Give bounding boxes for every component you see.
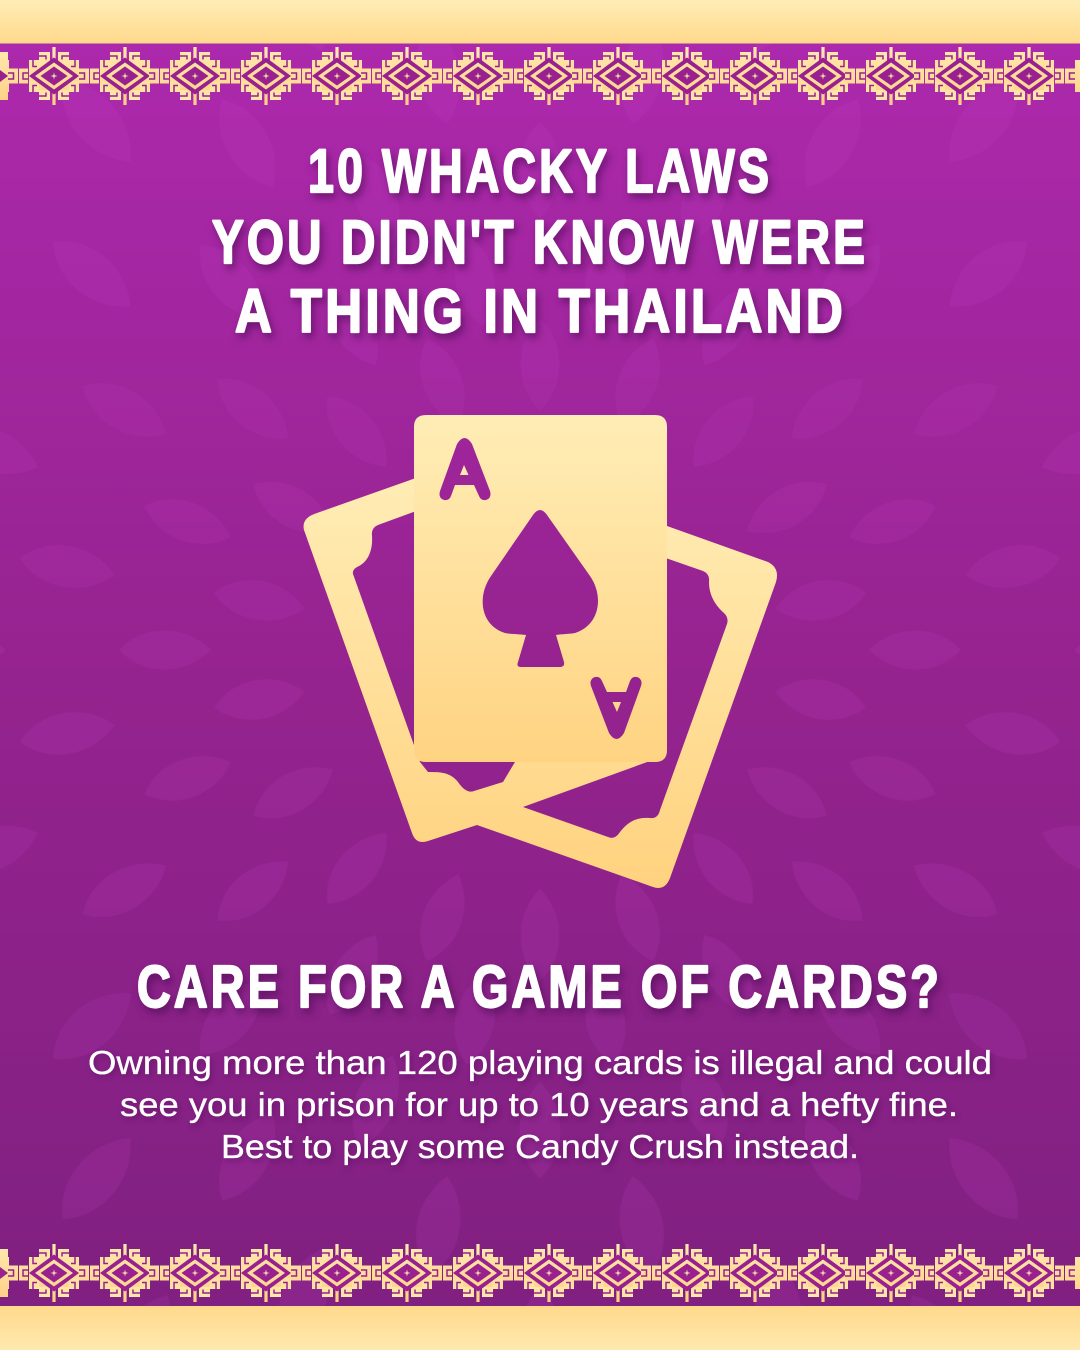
body text: see you in prison for up to 10 years and a hefty fine. [120, 1086, 958, 1123]
front ace of spades card [414, 415, 667, 762]
bottom ornamental border [0, 1244, 1080, 1302]
body text: Owning more than 120 playing cards is illegal and could [88, 1044, 992, 1081]
bottom gold band [0, 1306, 1080, 1350]
title: A THING IN THAILAND [235, 277, 846, 345]
top gold band [0, 0, 1080, 44]
title [212, 137, 868, 345]
icon: playing cards [304, 415, 777, 888]
body text: Best to play some Candy Crush instead. [221, 1128, 859, 1165]
top ornamental border [0, 47, 1080, 105]
title: 10 WHACKY LAWS [308, 137, 772, 205]
title: YOU DIDN'T KNOW WERE [212, 208, 868, 276]
back cards fanned left and right [304, 473, 777, 888]
body text [88, 1044, 992, 1165]
